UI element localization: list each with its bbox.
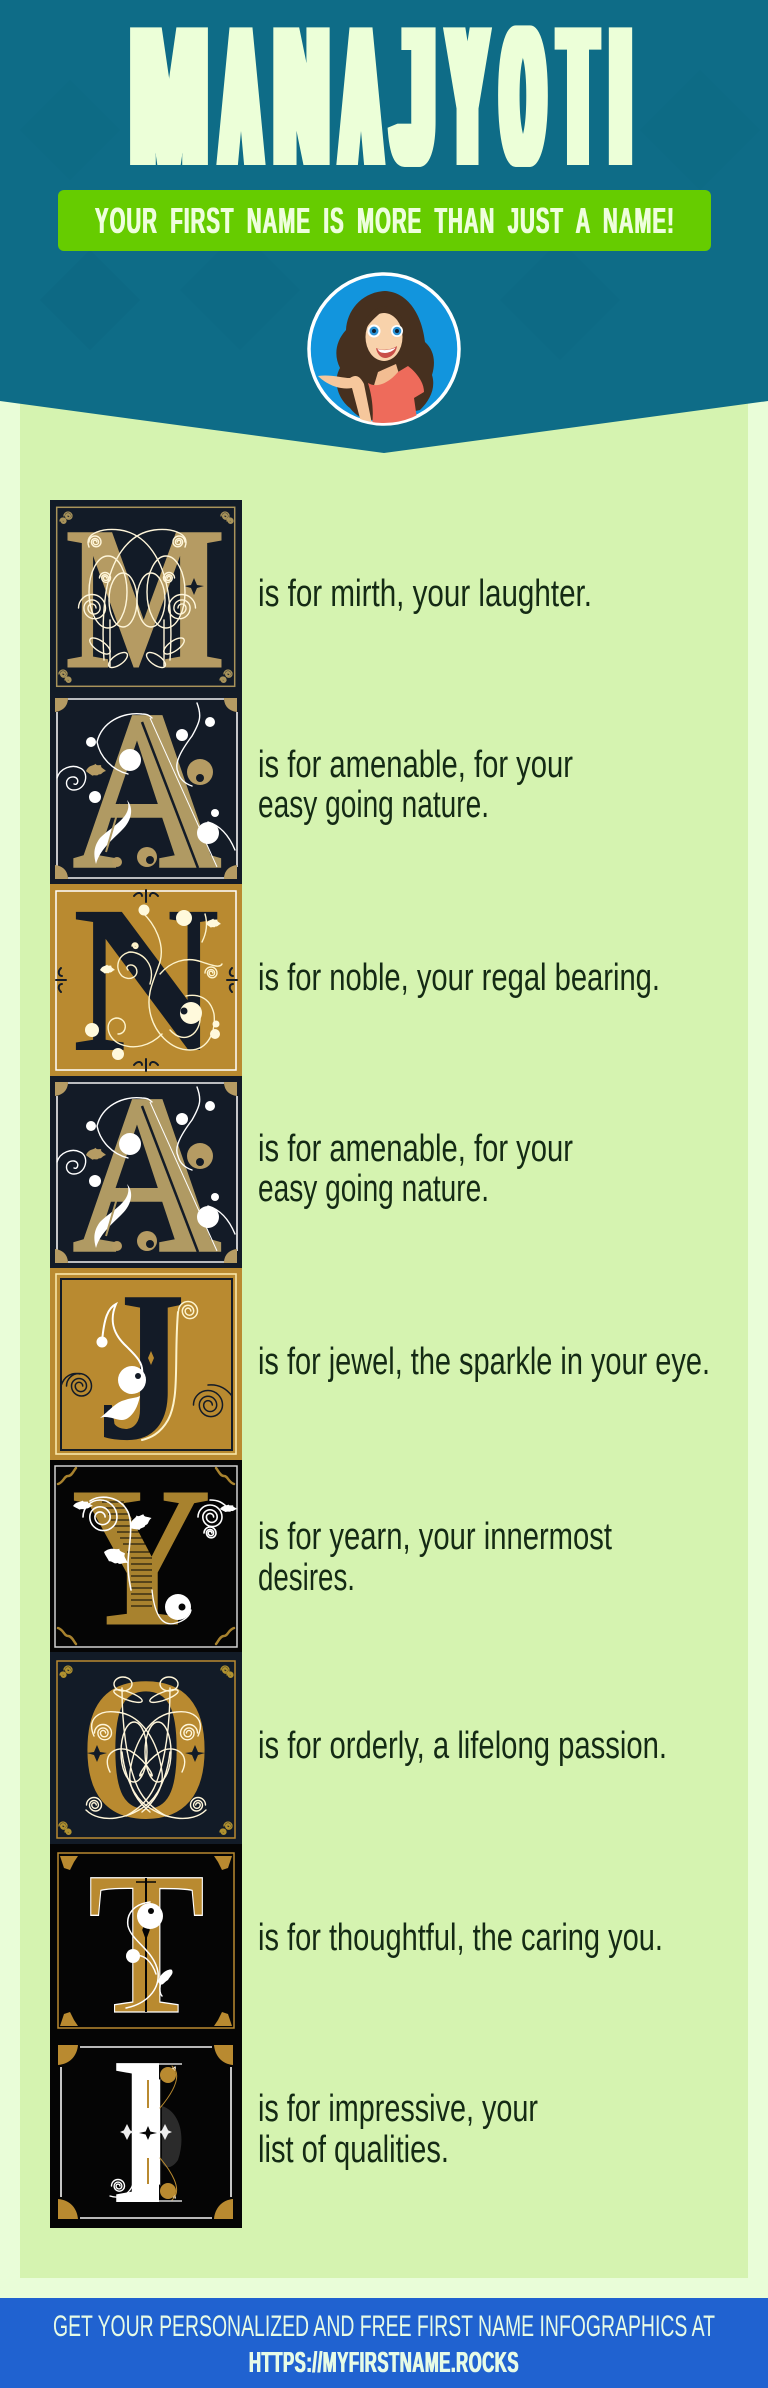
letter tile: O xyxy=(50,1635,242,1862)
letter tile: J xyxy=(50,1246,242,1485)
description: M: is for mirth, your laughter. xyxy=(258,573,592,615)
description: Y xyxy=(258,1516,612,1599)
letter tile: I xyxy=(50,2013,242,2248)
decorative letter M: M xyxy=(65,485,226,712)
decorative letter A: A xyxy=(72,663,222,917)
footer bar xyxy=(0,2298,768,2388)
letter tile: N xyxy=(50,862,242,1096)
tagline banner xyxy=(58,190,711,251)
decorative letter I: I xyxy=(110,2013,182,2248)
letter tile: T xyxy=(50,1830,242,2057)
footer text: website url: HTTPS://MYFIRSTNAME.ROCKS xyxy=(249,2347,519,2379)
description: A: is for amenable, for your xyxy=(258,744,573,786)
description: Y: desires. xyxy=(258,1557,355,1599)
description: I: list of qualities. xyxy=(258,2129,449,2171)
decorative letter J: J xyxy=(96,1246,186,1485)
panel: content background xyxy=(20,380,748,2278)
decorative letter N: N xyxy=(72,862,220,1096)
description: N: is for noble, your regal bearing. xyxy=(258,957,660,999)
letter tile: Y xyxy=(50,1447,242,1668)
description: A: easy going nature. xyxy=(258,784,489,826)
description: I xyxy=(258,2088,538,2171)
decorative letter A: A xyxy=(72,1047,222,1301)
letter tile: M xyxy=(50,485,242,712)
description: Y: is for yearn, your innermost xyxy=(258,1516,612,1558)
letter tile: A xyxy=(50,663,242,917)
header background xyxy=(0,0,768,453)
description: A: is for amenable, for your xyxy=(258,1128,573,1170)
description: A: easy going nature. xyxy=(258,1168,489,1210)
description: I: is for impressive, your xyxy=(258,2088,538,2130)
avatar: cartoon woman in circle xyxy=(309,274,459,426)
description: A xyxy=(258,744,573,826)
decorative letter T: T xyxy=(88,1830,205,2057)
letter tile: A xyxy=(50,1047,242,1301)
description: A xyxy=(258,1128,573,1210)
decorative letter O: O xyxy=(79,1635,213,1862)
decorative letter Y: Y xyxy=(71,1447,211,1668)
